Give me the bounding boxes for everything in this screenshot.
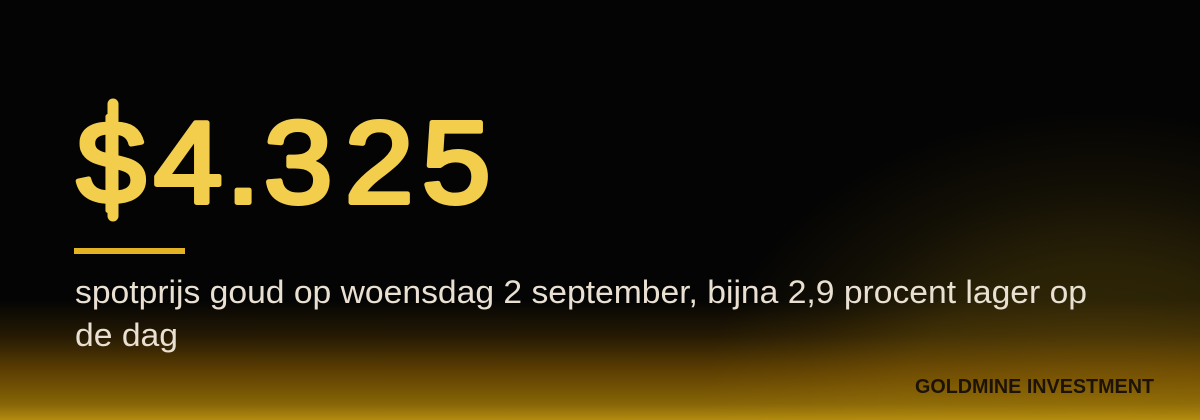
description text: de dag (75, 317, 178, 353)
description text: spotprijs goud op woensdag 2 september, bijna 2,9 procent lager op (75, 274, 1087, 310)
description text (75, 274, 1087, 353)
accent bar (74, 248, 185, 254)
brand label: GOLDMINE INVESTMENT (915, 376, 1154, 398)
headline price: $4.325 (77, 99, 490, 228)
